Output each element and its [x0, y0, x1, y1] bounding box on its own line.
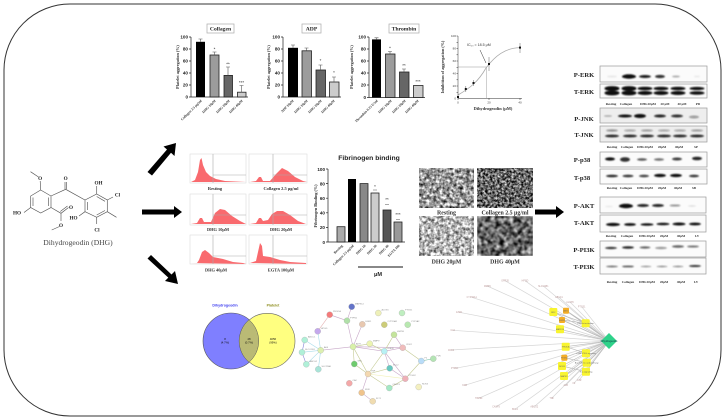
protein interaction network — [299, 302, 441, 404]
chart: thrombin aggregation: Platelet aggregation (%) — [349, 45, 354, 89]
chart: IC50 dose-response: 100 — [451, 34, 456, 38]
label: P-p38: P-p38 — [574, 157, 591, 164]
lane labels: 40μM — [674, 186, 683, 190]
lane labels — [607, 145, 698, 149]
compound-target-pathway network: CASP3 — [492, 406, 500, 408]
protein interaction network: BCL2 — [393, 364, 399, 366]
lane labels: DHG10μM — [640, 102, 657, 106]
western blot: PI3K — [573, 241, 706, 284]
SEM image: DHG 40: DHG 40μM — [490, 260, 520, 266]
lane labels: DHG10μM — [637, 186, 654, 190]
compound caption: Dihydrogeodin (DHG) — [43, 238, 113, 247]
protein interaction network: PIK3CA — [333, 310, 341, 313]
chart: thrombin aggregation: 40 — [361, 71, 366, 76]
protein interaction network: CYP1A2 — [411, 320, 420, 323]
protein interaction network: ABCG2 — [310, 360, 318, 363]
chart: ADP aggregation: 0 — [277, 95, 280, 100]
chart: thrombin aggregation: *** — [415, 79, 421, 84]
arrow: to aggregation assays — [148, 143, 176, 176]
chart: fibrinogen binding — [313, 155, 405, 278]
lane labels — [606, 234, 700, 238]
central diamond node — [601, 333, 618, 349]
chart: fibrinogen binding: *** — [395, 212, 401, 217]
protein interaction network: CA2 — [352, 379, 358, 382]
lane labels: 20μM — [658, 145, 667, 149]
compound-target-pathway network — [448, 280, 618, 411]
lane labels: DHG10μM — [639, 234, 656, 238]
label: T-PI3K: T-PI3K — [573, 264, 595, 271]
compound-target-pathway network: ALB — [564, 384, 568, 387]
chart: IC50 dose-response — [440, 34, 522, 111]
compound-target-pathway network: Ras signaling — [580, 372, 593, 374]
chart title: ADP — [306, 26, 318, 32]
compound-target-pathway network: NOS3 — [559, 366, 566, 368]
flow cytometry: EGTA — [249, 235, 307, 272]
flow cytometry: DHG 40: DHG 40μM — [205, 268, 228, 272]
lane labels: 40μM — [675, 145, 684, 149]
chart: IC50 dose-response: 0 — [457, 100, 459, 104]
lane labels: 40μM — [677, 280, 686, 284]
chart: thrombin aggregation: 0 — [363, 95, 366, 100]
chart: thrombin aggregation: 60 — [361, 59, 366, 64]
chart: fibrinogen binding: 100 — [317, 167, 325, 172]
chart: IC50 dose-response: IC₅₀ = 18.5 μM — [467, 43, 491, 47]
lane labels: 40 μM — [677, 102, 687, 106]
flow cytometry: EGTA: EGTA 100μM — [268, 268, 295, 272]
lane labels: SB — [692, 186, 697, 190]
chart: fibrinogen binding: 40 — [320, 211, 325, 216]
chart: collagen aggregation: 60 — [183, 59, 188, 64]
lane labels: 20μM — [660, 234, 669, 238]
flow cytometry: collagen — [249, 154, 307, 191]
label: T-ERK: T-ERK — [574, 89, 595, 96]
chart: thrombin aggregation: DHG 10μM — [377, 98, 393, 114]
chart: IC50 dose-response: 40 — [453, 72, 456, 76]
atom labels: HO — [69, 216, 78, 222]
atom labels: O — [38, 176, 42, 182]
lane labels — [606, 102, 701, 106]
SEM image: resting — [419, 168, 474, 216]
compound-target-pathway network: PTGS1 — [578, 306, 586, 308]
protein interaction network: SRC — [358, 360, 363, 362]
compound-target-pathway network: CDK2 — [448, 350, 455, 352]
atom labels: O — [69, 205, 73, 211]
atom labels: OH — [94, 180, 103, 186]
western blot: ERK — [574, 66, 707, 106]
chart: fibrinogen binding: DHG 20 — [366, 244, 378, 255]
chemical structure: dihydrogeodin — [13, 172, 121, 234]
SEM image: collagen — [477, 168, 533, 216]
lane labels — [607, 280, 699, 284]
chart: fibrinogen binding: 0 — [322, 240, 325, 245]
protein interaction network: SLCO1B1 — [305, 349, 316, 351]
lane labels: 40μM — [677, 234, 686, 238]
lane labels: PD — [696, 102, 701, 106]
lane labels: Collagen — [622, 280, 634, 284]
lane labels: Resting — [607, 186, 618, 190]
SEM image: DHG 20 — [419, 216, 474, 266]
lane labels: Collagen — [620, 186, 632, 190]
lane labels: Collagen — [621, 145, 633, 149]
chart: thrombin aggregation: 20 — [361, 83, 366, 88]
central diamond node: Dihydrogeodin — [601, 339, 618, 343]
compound-target-pathway network: GPR35 — [501, 280, 509, 282]
label: P-AKT: P-AKT — [574, 203, 595, 210]
flow cytometry: DHG 10 — [190, 194, 246, 232]
lane labels: SP — [694, 145, 698, 149]
Venn diagram: Dihydrogeodin — [212, 304, 238, 308]
protein interaction network: NOS3 — [422, 384, 429, 386]
Venn diagram: 4056 — [270, 337, 277, 341]
compound-target-pathway network: ABCC1 — [555, 296, 564, 299]
compound-target-pathway network: F2 — [573, 383, 576, 385]
lane labels: Resting — [607, 145, 618, 149]
compound-target-pathway network: ALOX5 — [566, 301, 574, 304]
chart: fibrinogen binding: 20 — [320, 225, 325, 230]
compound-target-pathway network: F2R — [577, 380, 582, 382]
compound-target-pathway network: HPGD — [522, 280, 529, 282]
chart: collagen aggregation: *** — [239, 80, 244, 85]
protein interaction network: ALB — [324, 346, 329, 349]
lane labels: LY — [694, 280, 699, 284]
compound-target-pathway network: Platelet activation — [578, 322, 595, 325]
chart: IC50 dose-response: 20 — [453, 84, 456, 88]
label: P-ERK: P-ERK — [574, 72, 595, 79]
compound-target-pathway network: MMP9 — [484, 286, 491, 288]
chart: collagen aggregation: 40 — [183, 71, 188, 76]
chart: collagen aggregation: ** — [226, 62, 230, 66]
chart: ADP aggregation: Platelet aggregation (%) — [266, 45, 271, 89]
western blot: AKT — [574, 197, 706, 238]
compound-target-pathway network: CYP19A1 — [467, 296, 477, 299]
compound-target-pathway network: TNF — [549, 398, 555, 400]
compound-target-pathway network: cGMP-PKG signaling — [576, 353, 597, 355]
arrow: to fibrinogen binding — [142, 206, 182, 218]
chart: IC50 dose-response: 20 — [487, 100, 491, 104]
chart: ADP aggregation: 20 — [275, 83, 280, 88]
Venn diagram: (0.7%) — [245, 340, 253, 344]
chart: fibrinogen binding: Fibrinogen Binding (%) — [313, 184, 318, 228]
SEM image: resting: Resting — [437, 210, 456, 216]
chart: thrombin aggregation: 80 — [361, 47, 366, 52]
protein interaction network: FLT1 — [376, 398, 382, 400]
protein interaction network: PTGS2 — [408, 375, 416, 377]
chart: IC50 dose-response: Inhibition of aggregation (%) — [440, 40, 445, 93]
chart: collagen aggregation: Collagen 2.5 μg/ml — [180, 99, 203, 121]
label: T-p38: T-p38 — [574, 175, 591, 182]
Venn diagram: (4.7%) — [221, 340, 229, 344]
protein interaction network: F2 — [424, 358, 428, 360]
flow cytometry: DHG 10: DHG 10μM — [207, 227, 230, 232]
chart: thrombin aggregation: Thrombin 0.15 U/ml — [354, 99, 379, 123]
chart: fibrinogen binding: μM — [374, 272, 382, 278]
chart title: Thrombin — [392, 26, 417, 32]
SEM image: DHG 20: DHG 20μM — [432, 260, 462, 266]
Venn diagram: (99%) — [269, 340, 277, 344]
chart: collagen aggregation: Platelet aggregation (%) — [175, 45, 180, 89]
SEM image: DHG 40 — [477, 216, 533, 266]
chart: fibrinogen binding: 80 — [320, 181, 325, 186]
atom labels: O — [59, 223, 63, 229]
chart: thrombin aggregation: ** — [402, 63, 406, 68]
chart: ADP aggregation: ADP 10μM — [280, 98, 295, 113]
chart: IC50 dose-response: 60 — [453, 59, 456, 63]
chart: fibrinogen binding: Resting — [333, 244, 344, 255]
chart: thrombin aggregation — [349, 24, 425, 123]
Venn diagram: 28 — [247, 337, 251, 341]
lane labels: 20μM — [660, 280, 669, 284]
compound-target-pathway network: SRC — [551, 312, 556, 314]
protein interaction network: PTPN1 — [350, 318, 358, 320]
compound-target-pathway network: KDR — [462, 385, 467, 387]
chart: IC50 dose-response: Dihydrogeodin (μM) — [474, 106, 513, 111]
compound-target-pathway network: BCL2 — [512, 409, 519, 411]
lane labels: 20μM — [658, 186, 667, 190]
chart: ADP aggregation: DHG 40μM — [320, 98, 336, 114]
chart: thrombin aggregation: DHG 20μM — [391, 98, 407, 114]
flow cytometry: DHG 20: DHG 20μM — [270, 227, 293, 232]
lane labels: Resting — [607, 280, 618, 284]
flow cytometry: DHG 20 — [249, 194, 307, 232]
label: P-JNK: P-JNK — [574, 116, 595, 123]
chart: ADP aggregation: 40 — [275, 71, 280, 76]
protein interaction network: F2R — [436, 356, 441, 358]
lane labels: Resting — [606, 102, 617, 106]
chart: collagen aggregation: 0 — [185, 95, 188, 100]
compound-target-pathway network: CA2 — [450, 329, 456, 332]
chart: collagen aggregation — [175, 24, 248, 121]
protein interaction network: MAPK14 — [355, 302, 364, 306]
chart: collagen aggregation: DHG 10μM — [201, 98, 217, 114]
compound-target-pathway network: ESR1 — [456, 312, 463, 314]
chart: fibrinogen binding: ** — [385, 197, 389, 202]
protein interaction network: EGFR — [388, 348, 394, 350]
protein interaction network: CYP19A1 — [388, 320, 398, 323]
chart: collagen aggregation: DHG 40μM — [228, 98, 244, 114]
lane labels: DHG10μM — [639, 280, 656, 284]
arrow: to network analysis — [148, 255, 178, 284]
protein interaction network: KDR — [365, 389, 370, 391]
chart: fibrinogen binding: DHG 40 — [378, 244, 390, 255]
lane labels: LY — [695, 234, 700, 238]
chart: collagen aggregation: * — [214, 46, 216, 52]
flow cytometry: resting — [190, 154, 246, 191]
protein interaction network: ALOX5 — [382, 308, 389, 312]
protein interaction network: PTGS1 — [405, 310, 413, 312]
lane labels: DHG10μM — [637, 145, 654, 149]
protein interaction network: CASP3 — [392, 383, 400, 386]
protein interaction network: MMP9 — [373, 340, 380, 342]
lane labels — [607, 186, 697, 190]
chart: ADP aggregation: 100 — [272, 35, 280, 40]
protein interaction network: HSP90 — [397, 331, 405, 333]
chart: IC50 dose-response: 40 — [518, 100, 522, 104]
chart: fibrinogen binding: Collagen 2.5 μg/ml — [332, 244, 355, 266]
chart: fibrinogen binding: * — [374, 184, 376, 189]
SEM image: collagen: Collagen 2.5 μg/ml — [481, 210, 529, 216]
chart: ADP aggregation: 60 — [275, 59, 280, 64]
Venn diagram: Platelet — [267, 304, 280, 308]
chart: IC50 dose-response: 0 — [454, 97, 456, 101]
protein interaction network: ABCC1 — [308, 336, 316, 338]
label: P-PI3K: P-PI3K — [573, 247, 595, 254]
western blot: p38 — [574, 152, 707, 190]
chart: collagen aggregation: DHG 20μM — [215, 98, 231, 114]
flow cytometry: DHG 40 — [190, 235, 246, 272]
protein interaction network: HPGD — [321, 328, 328, 330]
lane labels: Collagen — [621, 234, 633, 238]
chart: fibrinogen binding: 60 — [320, 196, 325, 201]
chart: ADP aggregation: DHG 20μM — [307, 98, 323, 114]
protein interaction network: ESR1 — [366, 321, 372, 323]
compound-target-pathway network: ABCG2 — [530, 406, 539, 408]
Venn diagram — [203, 304, 295, 369]
arrow: to western blots — [535, 206, 564, 218]
chart: ADP aggregation: 80 — [275, 47, 280, 52]
atom labels: Cl — [115, 192, 121, 198]
compound-target-pathway network: PTPN1 — [451, 368, 459, 370]
chart: fibrinogen binding: EGTA 100 — [387, 244, 401, 258]
chart: collagen aggregation: 100 — [180, 35, 188, 40]
atom labels: HO — [13, 210, 21, 216]
lane labels: 20 μM — [660, 102, 670, 106]
chart: collagen aggregation: 20 — [183, 83, 188, 88]
compound-target-pathway network: PIK3CA — [562, 346, 570, 348]
chart title: Collagen — [210, 26, 232, 32]
lane labels: Resting — [606, 234, 617, 238]
protein interaction network: TNF — [371, 370, 376, 372]
protein interaction network: CDK2 — [406, 344, 413, 346]
chart: IC50 dose-response: 80 — [453, 47, 456, 51]
lane labels: Collagen — [620, 102, 632, 106]
flow cytometry: collagen: Collagen 2.5 μg/ml — [263, 186, 299, 191]
chart: collagen aggregation: 80 — [183, 47, 188, 52]
chart: thrombin aggregation: * — [389, 46, 391, 50]
compound-target-pathway network: AKT1 — [563, 310, 569, 312]
chart: ADP aggregation: DHG 10μM — [293, 98, 309, 114]
protein interaction network: AKT1 — [356, 342, 362, 346]
chart: ADP aggregation: * — [320, 58, 322, 63]
Venn diagram: 8 — [224, 337, 226, 341]
atom labels: O — [64, 176, 68, 182]
compound-target-pathway network: Arachidonic acid pathway — [575, 362, 599, 364]
compound-target-pathway network: MAPK14 — [556, 328, 565, 331]
label: T-JNK: T-JNK — [574, 132, 594, 139]
compound-target-pathway network: EGFR — [559, 320, 565, 322]
chart: ADP aggregation: * — [333, 70, 335, 75]
chart title: Fibrinogen binding — [338, 155, 400, 162]
atom labels — [13, 176, 121, 234]
flow cytometry: resting: Resting — [208, 186, 223, 191]
chart: thrombin aggregation: DHG 40μM — [404, 98, 420, 114]
atom labels: Cl — [94, 228, 100, 234]
chart: thrombin aggregation: 100 — [358, 35, 366, 40]
chart: fibrinogen binding: DHG 10 — [355, 244, 367, 255]
compound-target-pathway network: HSP90 — [475, 398, 483, 400]
western blot: JNK — [574, 108, 707, 149]
chart: ADP aggregation — [266, 24, 341, 114]
protein interaction network: SLC22A6 — [322, 365, 332, 368]
label: T-AKT: T-AKT — [574, 220, 595, 227]
compound-target-pathway network: PTGS2 — [561, 358, 569, 360]
compound-target-pathway network: MAPK1 — [560, 375, 568, 378]
compound-target-pathway network: SLCO1B1 — [538, 286, 549, 288]
